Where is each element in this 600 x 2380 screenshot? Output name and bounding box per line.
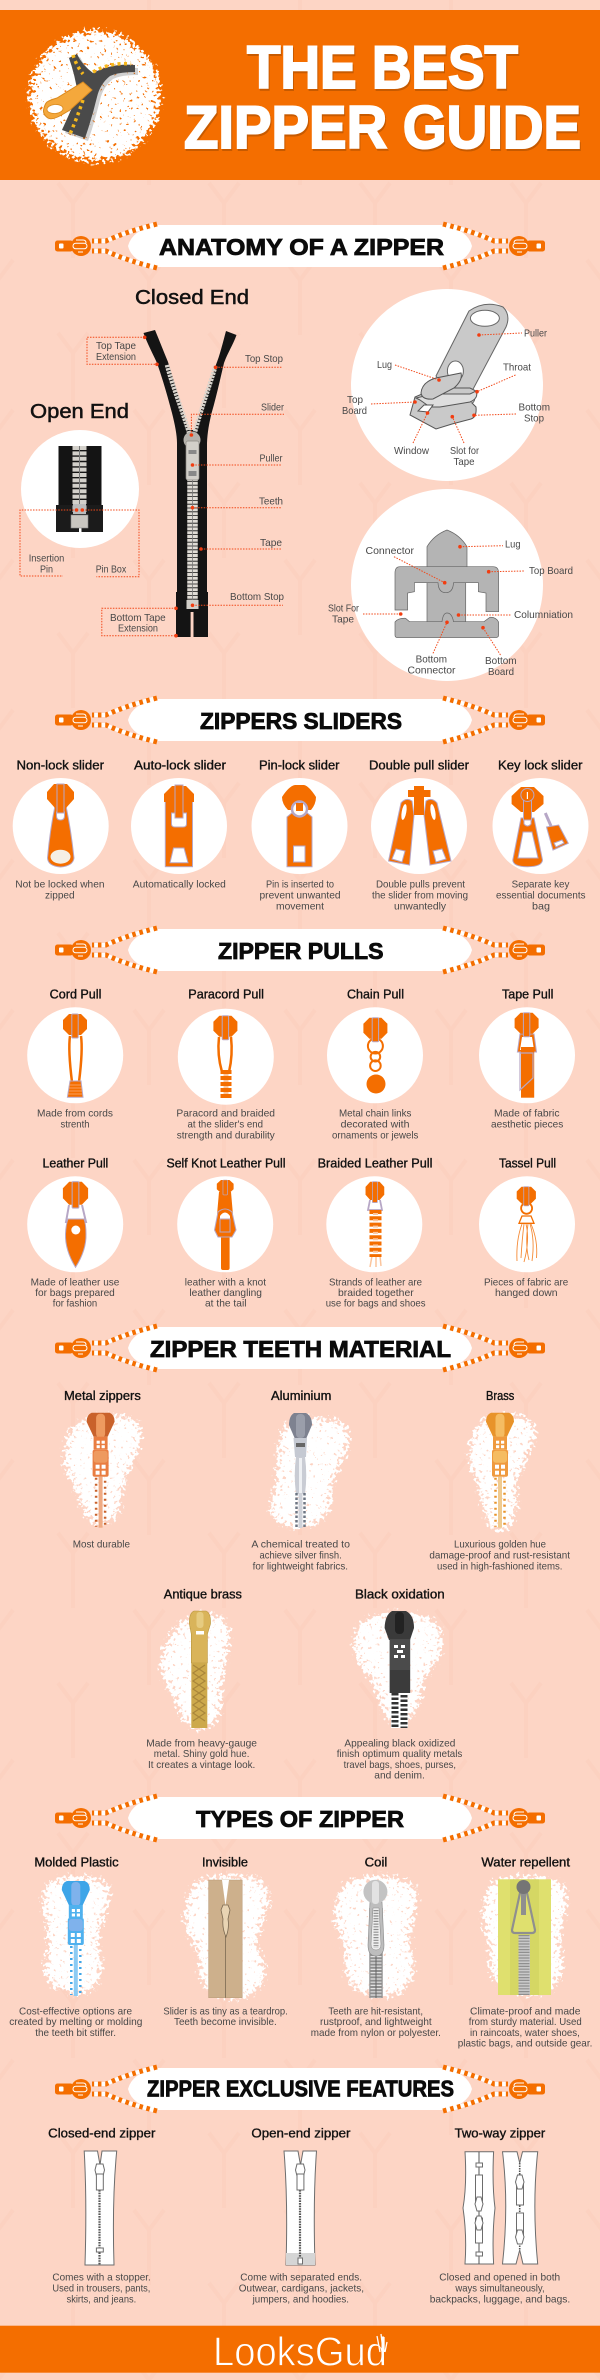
item: antique brass: Made from heavy-gauge xyxy=(146,1737,257,1749)
item: coil: Teeth are hit-resistant, xyxy=(328,2005,423,2017)
item: black oxidation: Black oxidation xyxy=(355,1588,445,1602)
item: black oxidation: travel bags, shoes, purses, xyxy=(344,1759,456,1771)
item: double pull slider: unwantedly xyxy=(394,900,447,912)
item: aluminium: Aluminium xyxy=(271,1389,331,1403)
circle: slider 3d diagram xyxy=(351,289,543,481)
item: two-way zipper: Closed and opened in both xyxy=(439,2272,560,2284)
callout: top stop xyxy=(214,353,283,369)
footer bar xyxy=(0,2326,600,2375)
item: two-way zipper: backpacks, luggage, and bags. xyxy=(430,2293,570,2305)
item: key lock slider: bag xyxy=(532,900,550,912)
item: aluminium: achieve silver finsh. xyxy=(260,1549,342,1561)
item: antique brass xyxy=(146,1588,257,1771)
callouts: cross section labels: Connector xyxy=(366,545,414,557)
callout: bottom stop: Bottom Stop xyxy=(230,591,284,603)
item: paracord pull: strength and durability xyxy=(177,1130,275,1142)
callouts: slider 3d labels: Top xyxy=(347,394,363,406)
item: non-lock slider: zipped xyxy=(45,889,75,901)
callouts: slider 3d labels xyxy=(342,328,550,468)
item: chain pull: Metal chain links xyxy=(339,1108,411,1120)
item: invisible xyxy=(163,1856,288,2028)
callouts: cross section labels: Top Board xyxy=(529,565,573,577)
item: brass xyxy=(429,1389,570,1572)
item: molded plastic: Molded Plastic xyxy=(34,1856,119,1870)
item: cord pull: Cord Pull xyxy=(50,987,101,1001)
callouts: cross section labels xyxy=(328,539,573,678)
item: open-end zipper: jumpers, and hoodies. xyxy=(252,2293,349,2305)
closed end zipper diagram xyxy=(144,330,236,637)
callout: top tape extension xyxy=(87,336,159,366)
callouts: cross section labels: Slot For xyxy=(328,603,359,615)
item: self knot leather pull xyxy=(166,1157,286,1310)
callout: bottom tape extension xyxy=(102,606,178,638)
item: brass: damage-proof and rust-resistant xyxy=(429,1549,570,1561)
circle: slider cross section diagram xyxy=(351,489,543,681)
item: water repellent: from sturdy material. Used xyxy=(469,2016,582,2028)
item: double pull slider: Double pulls prevent xyxy=(376,878,465,890)
callout: teeth xyxy=(191,495,283,510)
item: non-lock slider: Not be locked when xyxy=(15,878,105,890)
callouts: slider 3d labels: Slot for xyxy=(450,445,479,457)
item: brass: Luxurious golden hue xyxy=(454,1539,546,1551)
item: water repellent xyxy=(458,1856,592,2050)
item: leather pull: for bags prepared xyxy=(35,1287,115,1299)
item: chain pull: ornaments or jewels xyxy=(332,1130,418,1142)
item: open-end zipper xyxy=(239,2127,364,2305)
item: molded plastic: Cost-effective options are xyxy=(19,2005,132,2017)
callouts: slider 3d labels: Puller xyxy=(524,328,547,340)
item: tassel pull: Pieces of fabric are xyxy=(484,1276,568,1288)
item: self knot leather pull: Self Knot Leather Pull xyxy=(166,1157,286,1171)
heading: closed end: Closed End xyxy=(135,287,249,309)
icon: zipper logo xyxy=(27,28,163,164)
item: auto-lock slider: Auto-lock slider xyxy=(134,758,226,772)
item: two-way zipper xyxy=(430,2127,570,2305)
item: paracord pull: Paracord and braided xyxy=(176,1108,275,1120)
item: antique brass: It creates a vintage look. xyxy=(148,1759,255,1771)
callout: pin box xyxy=(80,508,139,577)
item: black oxidation xyxy=(337,1588,462,1782)
heading: open end: Open End xyxy=(30,401,129,423)
callout: tape xyxy=(199,537,282,551)
banner: sliders: ZIPPERS SLIDERS xyxy=(200,708,402,734)
callouts: cross section labels: Lug xyxy=(505,539,521,551)
item: coil: rustproof, and lightweight xyxy=(320,2016,432,2028)
item: key lock slider: Separate key xyxy=(512,878,570,890)
callout: teeth: Teeth xyxy=(259,495,283,507)
callout: puller: Puller xyxy=(260,453,283,465)
item: chain pull xyxy=(327,987,423,1142)
item: antique brass: metal. Shiny gold hue. xyxy=(154,1748,250,1760)
callouts: cross section labels: Bottom xyxy=(416,654,447,666)
item: chain pull: decorated with xyxy=(341,1119,410,1131)
item: antique brass: Antique brass xyxy=(164,1588,242,1602)
callouts: cross section labels: Columniation xyxy=(514,609,573,621)
item: two-way zipper: Two-way zipper xyxy=(455,2127,545,2141)
callout: insertion pin xyxy=(20,508,78,576)
item: double pull slider: Double pull slider xyxy=(369,758,469,772)
banner: sliders xyxy=(55,698,545,742)
banner: features xyxy=(55,2067,545,2111)
section: zipper pulls xyxy=(27,928,575,1310)
item: braided leather pull: use for bags and shoes xyxy=(326,1298,426,1310)
banner: types: TYPES OF ZIPPER xyxy=(196,1806,404,1832)
item: leather pull: Leather Pull xyxy=(42,1157,108,1171)
callout: top stop: Top Stop xyxy=(245,353,283,365)
callout: bottom tape extension: Extension xyxy=(118,623,158,635)
item: molded plastic xyxy=(9,1856,143,2039)
item: coil xyxy=(311,1856,441,2039)
banner: teeth material: ZIPPER TEETH MATERIAL xyxy=(150,1336,451,1362)
banner: features: ZIPPER EXCLUSIVE FEATURES xyxy=(147,2076,454,2102)
item: tassel pull: Tassel Pull xyxy=(499,1157,556,1171)
item: auto-lock slider: Automatically locked xyxy=(133,878,226,890)
section: zippers sliders xyxy=(13,698,588,912)
item: black oxidation: finish optimum quality metals xyxy=(337,1748,462,1760)
item: tassel pull xyxy=(479,1157,575,1299)
item: water repellent: in raincoats, water shoes, xyxy=(470,2027,580,2039)
item: aluminium xyxy=(251,1389,353,1572)
item: pin-lock slider: Pin-lock slider xyxy=(259,758,340,772)
item: brass: Brass xyxy=(486,1389,514,1403)
item: key lock slider: Key lock slider xyxy=(498,758,582,772)
item: metal zippers: Most durable xyxy=(73,1539,130,1551)
section: anatomy xyxy=(20,224,573,681)
banner: pulls xyxy=(55,928,545,972)
item: leather pull xyxy=(27,1157,123,1310)
banner: types xyxy=(55,1796,545,1840)
section: types of zipper xyxy=(9,1796,592,2050)
item: two-way zipper: ways simultaneously, xyxy=(454,2283,545,2295)
item: self knot leather pull: leather dangling xyxy=(189,1287,262,1299)
callouts: slider 3d labels: Tape xyxy=(454,456,475,468)
callout: insertion pin: Insertion xyxy=(29,553,64,565)
item: black oxidation: and denim. xyxy=(374,1770,425,1782)
item: invisible: Teeth become invisible. xyxy=(174,2016,277,2028)
callout: insertion pin: Pin xyxy=(40,564,53,576)
banner: anatomy xyxy=(55,224,545,268)
item: self knot leather pull: leather with a knot xyxy=(185,1276,266,1288)
item: pin-lock slider: movement xyxy=(276,900,324,912)
item: cord pull: strenth xyxy=(60,1119,90,1131)
item: braided leather pull: Strands of leather are xyxy=(329,1276,422,1288)
item: double pull slider xyxy=(369,758,469,912)
item: braided leather pull: braided together xyxy=(338,1287,414,1299)
item: coil: Coil xyxy=(365,1856,387,1870)
item: self knot leather pull: at the tail xyxy=(205,1298,246,1310)
open end zipper circle xyxy=(21,430,139,548)
section: zipper teeth material xyxy=(55,1326,570,1782)
item: paracord pull: at the slider's end xyxy=(188,1119,263,1131)
item: open-end zipper: Open-end zipper xyxy=(251,2127,350,2141)
item: non-lock slider: Non-lock slider xyxy=(16,758,104,772)
callout: tape: Tape xyxy=(260,537,282,549)
item: closed-end zipper xyxy=(48,2127,155,2305)
item: closed-end zipper: Closed-end zipper xyxy=(48,2127,155,2141)
footer logo: LooksGud xyxy=(213,2329,387,2375)
item: paracord pull xyxy=(176,987,275,1142)
item: open-end zipper: Outwear, cardigans, jackets, xyxy=(239,2283,364,2295)
callouts: cross section labels: Board xyxy=(488,666,514,678)
item: aluminium: for lightweight fabrics. xyxy=(253,1560,348,1572)
item: brass: used in high-fashioned items. xyxy=(437,1560,562,1572)
callout: top tape extension: Top Tape xyxy=(96,340,136,352)
item: water repellent: Climate-proof and made xyxy=(470,2005,581,2017)
item: metal zippers xyxy=(62,1389,144,1551)
callouts: slider 3d labels: Board xyxy=(342,405,367,417)
item: closed-end zipper: Comes with a stopper. xyxy=(52,2272,151,2284)
callouts: cross section labels: Bottom xyxy=(485,655,517,667)
callouts: cross section labels: Connector xyxy=(408,664,456,676)
item: auto-lock slider xyxy=(131,758,227,890)
item: open-end zipper: Come with separated ends. xyxy=(240,2272,362,2284)
callouts: slider 3d labels: Bottom xyxy=(518,402,550,414)
banner: pulls: ZIPPER PULLS xyxy=(218,938,384,964)
item: key lock slider xyxy=(492,758,588,912)
title: THE BEST xyxy=(247,34,518,101)
item: leather pull: Made of leather use xyxy=(31,1276,120,1288)
callout: pin box: Pin Box xyxy=(96,564,127,576)
item: tape pull xyxy=(479,987,575,1131)
banner: anatomy: ANATOMY OF A ZIPPER xyxy=(159,234,444,260)
item: molded plastic: the teeth bit stiffer. xyxy=(35,2027,116,2039)
item: invisible: Slider is as tiny as a teardrop. xyxy=(163,2005,288,2017)
item: tape pull: Made of fabric xyxy=(494,1108,560,1120)
callout: bottom stop xyxy=(191,591,284,607)
item: non-lock slider xyxy=(13,758,109,901)
item: braided leather pull xyxy=(318,1157,432,1310)
section: exclusive features xyxy=(48,2067,570,2305)
title: ZIPPER GUIDE xyxy=(184,94,581,161)
item: water repellent: plastic bags, and outside gear. xyxy=(458,2038,592,2050)
callouts: slider 3d labels: Window xyxy=(394,445,429,457)
item: closed-end zipper: skirts, and jeans. xyxy=(67,2293,136,2305)
callout: puller xyxy=(191,453,283,467)
callouts: slider 3d labels: Stop xyxy=(524,413,544,425)
item: cord pull: Made from cords xyxy=(37,1108,113,1120)
item: tape pull: aesthetic pieces xyxy=(491,1119,563,1131)
item: pin-lock slider: Pin is inserted to xyxy=(266,878,334,890)
item: pin-lock slider: prevent unwanted xyxy=(260,889,341,901)
item: chain pull: Chain Pull xyxy=(347,987,404,1001)
item: coil: made from nylon or polyester. xyxy=(311,2027,441,2039)
item: closed-end zipper: Used in trousers, pants, xyxy=(52,2283,150,2295)
item: leather pull: for fashion xyxy=(53,1298,97,1310)
item: aluminium: A chemical treated to xyxy=(251,1539,350,1551)
item: black oxidation: Appealing black oxidized xyxy=(344,1737,456,1749)
item: key lock slider: essential documents xyxy=(496,889,586,901)
callout: slider: Slider xyxy=(261,402,284,414)
callout: slider xyxy=(190,402,284,437)
item: tape pull: Tape Pull xyxy=(502,987,553,1001)
callouts: slider 3d labels: Lug xyxy=(377,359,392,371)
item: metal zippers: Metal zippers xyxy=(64,1389,141,1403)
item: paracord pull: Paracord Pull xyxy=(188,987,264,1001)
item: invisible: Invisible xyxy=(202,1856,248,1870)
callout: top tape extension: Extension xyxy=(96,351,136,363)
item: braided leather pull: Braided Leather Pull xyxy=(318,1157,432,1171)
item: cord pull xyxy=(27,987,123,1131)
callouts: cross section labels: Tape xyxy=(332,614,354,626)
header banner xyxy=(0,10,600,180)
item: double pull slider: the slider from moving xyxy=(372,889,468,901)
banner: teeth material xyxy=(55,1326,545,1370)
item: molded plastic: created by melting or molding xyxy=(9,2016,143,2028)
item: water repellent: Water repellent xyxy=(481,1856,571,1870)
item: tassel pull: hanged down xyxy=(495,1287,558,1299)
callouts: slider 3d labels: Throat xyxy=(503,362,531,374)
item: pin-lock slider xyxy=(252,758,348,912)
callout: bottom tape extension: Bottom Tape xyxy=(110,612,166,624)
title xyxy=(184,34,581,161)
